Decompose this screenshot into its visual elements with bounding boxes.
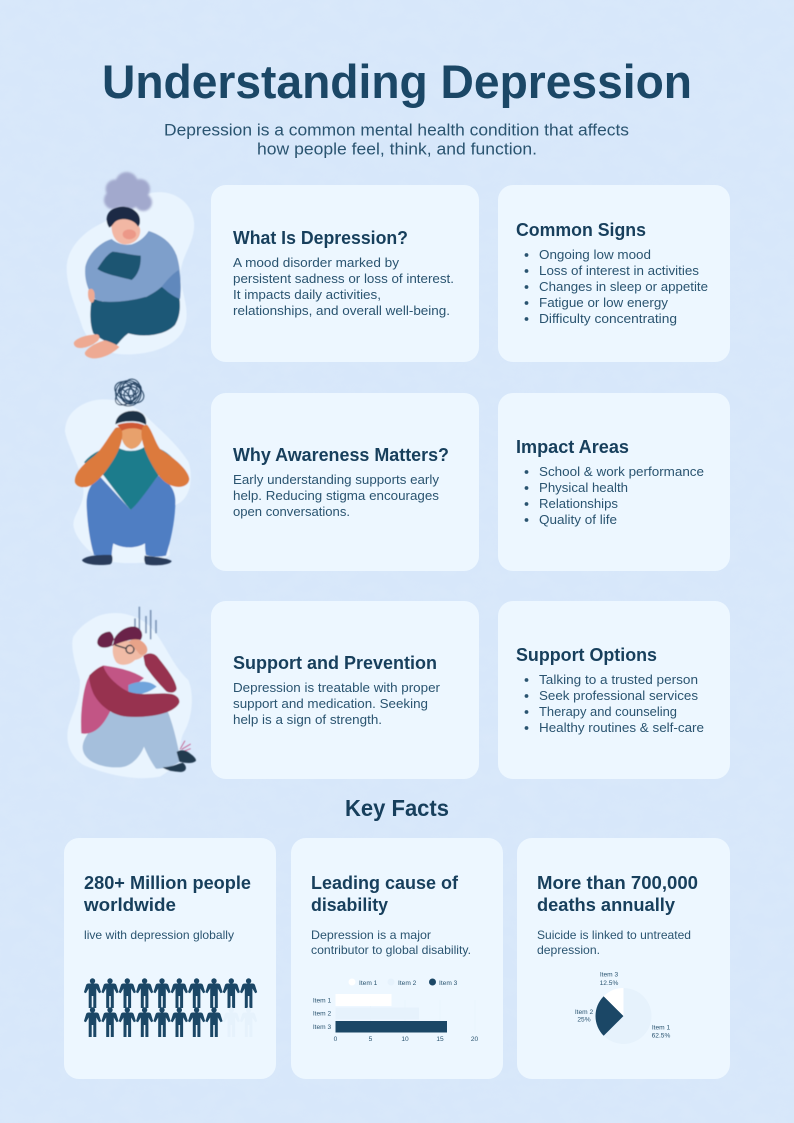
body text bbox=[233, 472, 439, 519]
face bbox=[113, 641, 145, 665]
pie labels: Item 1 bbox=[652, 1024, 670, 1032]
legs bbox=[90, 287, 180, 346]
face bbox=[121, 423, 143, 449]
curls bbox=[117, 423, 145, 431]
pie labels: 25% bbox=[577, 1016, 591, 1024]
bullet list: Fatigue or low energy bbox=[539, 295, 668, 310]
chart legend: Item 3 bbox=[439, 980, 458, 987]
panel: Common Signs bbox=[498, 185, 730, 362]
body text: persistent sadness or loss of interest. bbox=[233, 271, 454, 286]
panel: Support and Prevention bbox=[211, 601, 479, 779]
chart legend: Item 2 bbox=[398, 980, 417, 987]
body text: help. Reducing stigma encourages bbox=[233, 488, 439, 503]
panel: Leading cause of disability bbox=[291, 838, 503, 1079]
body text: A mood disorder marked by bbox=[233, 255, 399, 270]
forearm bbox=[143, 653, 177, 693]
heading: Why Awareness Matters? bbox=[233, 444, 449, 465]
rain lines bbox=[135, 607, 156, 639]
body text: support and medication. Seeking bbox=[233, 696, 428, 711]
body text: It impacts daily activities, bbox=[233, 287, 381, 302]
fact text bbox=[537, 928, 691, 957]
pie labels: 12.5% bbox=[600, 980, 618, 987]
pie labels bbox=[575, 972, 670, 1040]
hair bbox=[115, 411, 146, 425]
bullet list: Talking to a trusted person bbox=[539, 672, 698, 687]
body text bbox=[233, 255, 454, 318]
bullet list: Loss of interest in activities bbox=[539, 263, 699, 278]
body text: open conversations. bbox=[233, 504, 350, 519]
bullet list: Healthy routines & self-care bbox=[539, 720, 704, 735]
bullet list: Seek professional services bbox=[539, 688, 698, 703]
pie labels: Item 3 bbox=[600, 972, 618, 978]
chart axis labels: 10 bbox=[401, 1036, 409, 1043]
chart axis labels: Item 3 bbox=[313, 1024, 331, 1031]
bullet list bbox=[525, 247, 708, 326]
body text: help is a sign of strength. bbox=[233, 712, 382, 727]
title: Understanding Depression bbox=[102, 55, 692, 108]
bullet list: Changes in sleep or appetite bbox=[539, 279, 708, 294]
panel: Why Awareness Matters? bbox=[211, 393, 479, 571]
shoes bbox=[177, 750, 196, 763]
bullet list: Relationships bbox=[539, 496, 618, 511]
pie chart bbox=[575, 972, 670, 1044]
chart axis labels bbox=[313, 998, 478, 1043]
hair bbox=[107, 207, 140, 228]
laces bbox=[180, 741, 191, 752]
illustration: person under a cloud bbox=[67, 172, 194, 358]
hair bbox=[97, 626, 142, 648]
heading: Support Options bbox=[516, 644, 657, 665]
panel: Support Options bbox=[498, 601, 730, 779]
hand bbox=[88, 289, 95, 303]
bullet list: School & work performance bbox=[539, 464, 704, 479]
fact text bbox=[311, 928, 471, 957]
bullet list: Difficulty concentrating bbox=[539, 311, 677, 326]
chart axis labels: Item 2 bbox=[313, 1010, 331, 1018]
heading: Impact Areas bbox=[516, 436, 629, 457]
fact heading: 280+ Million people bbox=[84, 872, 251, 893]
chart legend: Item 1 bbox=[359, 980, 378, 987]
panel: Impact Areas bbox=[498, 393, 730, 571]
bullet list bbox=[525, 672, 704, 735]
bullet list: Quality of life bbox=[539, 512, 617, 527]
pie labels: 62.5% bbox=[652, 1032, 670, 1040]
sweater bbox=[81, 665, 144, 734]
shirt bbox=[84, 446, 172, 510]
legs bbox=[87, 476, 175, 557]
heading: What Is Depression? bbox=[233, 227, 408, 248]
heading: Support and Prevention bbox=[233, 652, 437, 673]
fact heading: worldwide bbox=[83, 894, 176, 915]
illustration: person holding head with scribble bbox=[65, 377, 191, 565]
cloud bbox=[104, 172, 152, 211]
subtitle bbox=[164, 122, 629, 158]
chart axis labels: Item 1 bbox=[313, 998, 331, 1004]
fact text: Suicide is linked to untreated bbox=[537, 928, 691, 942]
fact heading: Leading cause of bbox=[311, 872, 459, 893]
fact heading: disability bbox=[311, 894, 389, 915]
chart axis labels: 5 bbox=[369, 1036, 373, 1043]
arm bbox=[89, 666, 179, 717]
sweater bbox=[85, 231, 181, 302]
bullet list: Ongoing low mood bbox=[539, 247, 651, 262]
fact text: depression. bbox=[537, 943, 600, 957]
panel: More than 700,000 deaths annually bbox=[517, 838, 730, 1079]
chart legend bbox=[348, 978, 458, 987]
subtitle: how people feel, think, and function. bbox=[257, 140, 537, 158]
shoes bbox=[82, 555, 113, 565]
glasses bbox=[115, 645, 134, 653]
bullet list: Therapy and counseling bbox=[539, 704, 677, 719]
bar chart bbox=[313, 978, 478, 1043]
head bbox=[112, 218, 140, 244]
body text: Depression is treatable with proper bbox=[233, 680, 441, 695]
panel: What Is Depression? bbox=[211, 185, 479, 362]
chart axis labels: 15 bbox=[436, 1036, 444, 1043]
fact heading bbox=[311, 872, 459, 915]
under shirt bbox=[128, 682, 157, 695]
illustration: person resting head in hand bbox=[67, 607, 196, 778]
scribble bbox=[111, 377, 147, 409]
body text bbox=[233, 680, 441, 727]
hand bbox=[128, 639, 147, 655]
bullet list: Physical health bbox=[539, 480, 628, 495]
body text: relationships, and overall well-being. bbox=[233, 303, 450, 318]
heading: Key Facts: Key Facts bbox=[345, 795, 449, 821]
fact heading: More than 700,000 bbox=[537, 872, 698, 893]
bullet list bbox=[525, 464, 704, 527]
pie labels: Item 2 bbox=[575, 1009, 593, 1016]
fact heading bbox=[83, 872, 251, 915]
panel: 280+ Million people bbox=[64, 838, 276, 1079]
chart axis labels: 0 bbox=[334, 1036, 338, 1043]
arms bbox=[75, 427, 122, 487]
knees bbox=[97, 252, 141, 280]
fact heading: deaths annually bbox=[537, 894, 676, 915]
fact text: contributor to global disability. bbox=[311, 943, 471, 957]
heading: Common Signs bbox=[516, 219, 646, 240]
fact heading bbox=[537, 872, 698, 915]
feet bbox=[74, 334, 99, 348]
subtitle: Depression is a common mental health condition that affects bbox=[164, 122, 629, 140]
body text: Early understanding supports early bbox=[233, 472, 439, 487]
pictogram: people bbox=[84, 978, 257, 1037]
chart axis labels: 20 bbox=[471, 1036, 478, 1043]
fact text: Depression is a major bbox=[311, 928, 431, 942]
fact text: live with depression globally bbox=[84, 928, 234, 942]
jeans bbox=[83, 702, 181, 769]
